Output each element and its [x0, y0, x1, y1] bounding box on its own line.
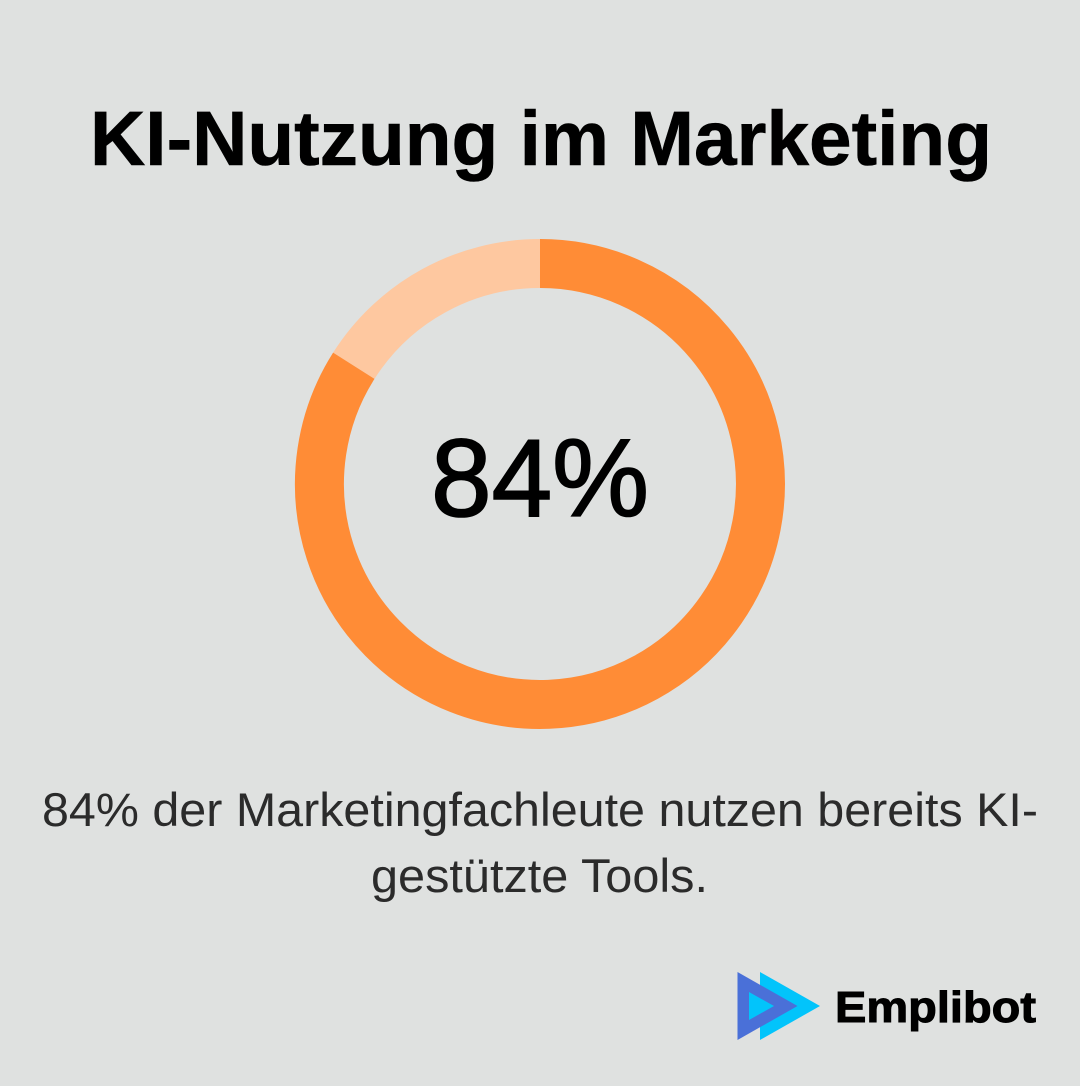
- description text: [42, 783, 1038, 902]
- logo wordmark: Emplibot: [835, 983, 1036, 1032]
- center value: 84%: [431, 417, 649, 540]
- icon: inner light triangle: [749, 992, 774, 1020]
- logo: Emplibot: [738, 972, 1036, 1040]
- donut segment: 84%: [319, 264, 760, 705]
- donut chart: 84%: [319, 264, 760, 705]
- icon: dark blue play triangle: [738, 972, 798, 1040]
- description line 2: gestützte Tools.: [371, 849, 708, 902]
- description line 1: 84% der Marketingfachleute nutzen bereits KI-: [42, 783, 1038, 836]
- donut segment: remaining 16%: [354, 264, 540, 366]
- title: KI-Nutzung im Marketing: [90, 96, 992, 182]
- icon: light blue play triangle: [760, 972, 820, 1040]
